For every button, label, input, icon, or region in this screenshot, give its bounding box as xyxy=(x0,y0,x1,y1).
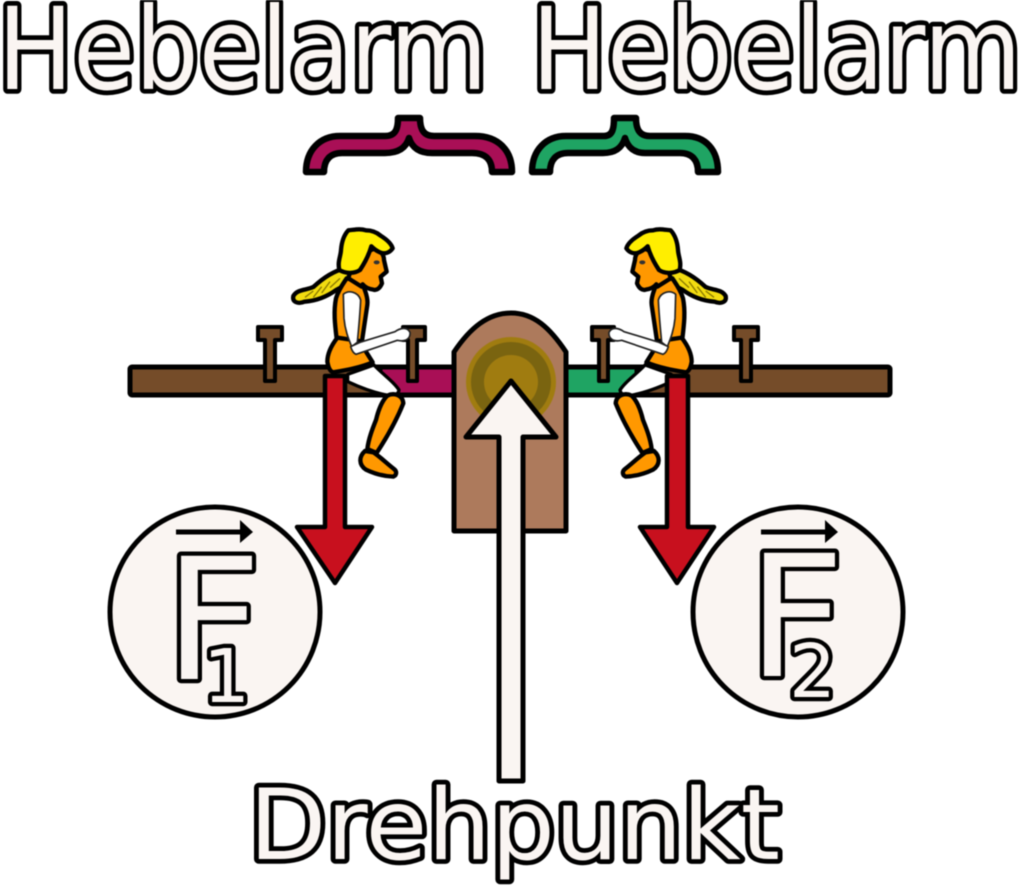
label: Drehpunkt: Drehpunkt xyxy=(249,769,780,883)
vector arrow F1 xyxy=(176,520,253,543)
pivot post xyxy=(454,313,566,531)
beam: right lever section xyxy=(565,367,637,395)
letter F: F xyxy=(748,519,845,716)
brace: right lever arm xyxy=(532,118,718,172)
subscript 2: 2 xyxy=(789,629,836,715)
seesaw beam xyxy=(130,367,890,395)
seesaw handles xyxy=(258,327,758,381)
girl left xyxy=(293,229,410,477)
arrow: force F1 xyxy=(297,376,372,583)
beam: left lever section xyxy=(380,367,455,395)
arrow: force F2 xyxy=(640,376,714,583)
vector arrow F2 xyxy=(761,520,838,543)
circle: F2 xyxy=(693,507,903,717)
arrow: pivot reaction xyxy=(466,381,556,781)
brace: left lever arm xyxy=(306,118,512,172)
letter F: F xyxy=(164,522,262,719)
subscript 1: 1 xyxy=(203,634,250,720)
girl right xyxy=(609,229,726,477)
circle: F1 xyxy=(110,507,320,720)
pivot bearing xyxy=(466,337,556,427)
